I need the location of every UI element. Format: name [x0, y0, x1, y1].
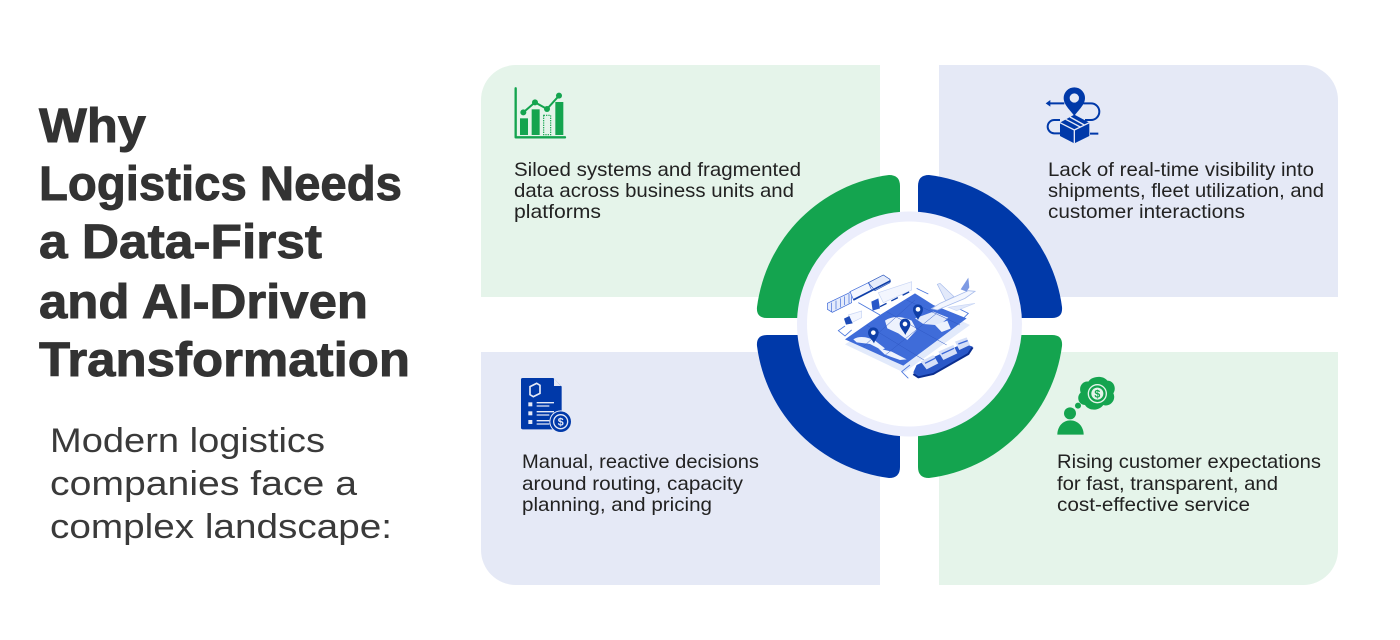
- icon: location pin and package: [1046, 87, 1099, 143]
- text: manual decisions: planning, and pricing: [522, 494, 712, 516]
- panel: manual decisions: [481, 352, 880, 585]
- center circle: [802, 216, 1017, 432]
- title: Transformation: [39, 334, 410, 387]
- text: siloed systems: platforms: [514, 201, 601, 223]
- connector lines: [838, 288, 968, 378]
- ring segment: bottom left blue: [757, 335, 900, 478]
- icon: document with dollar coin: [521, 378, 572, 433]
- text: lack of visibility: Lack of real-time visibility into: [1048, 159, 1314, 181]
- ring segment: top right blue: [918, 175, 1062, 318]
- text: siloed systems: [514, 159, 801, 223]
- ring segment: bottom right green: [918, 335, 1062, 478]
- container ship: [913, 337, 973, 377]
- subtitle: complex landscape:: [50, 508, 392, 546]
- panel: siloed systems: [481, 65, 880, 297]
- text: rising expectations: cost-effective service: [1057, 494, 1250, 516]
- text: rising expectations: for fast, transparent, and: [1057, 473, 1278, 495]
- text: manual decisions: around routing, capacity: [522, 473, 743, 495]
- text: siloed systems: data across business units and: [514, 180, 794, 202]
- icon: customer thinking about cost: [1057, 377, 1115, 435]
- panel: rising expectations: [939, 352, 1338, 585]
- title: and AI-Driven: [39, 276, 368, 329]
- text: rising expectations: Rising customer expectations: [1057, 451, 1321, 473]
- map sheet: [845, 293, 970, 373]
- text: manual decisions: Manual, reactive decisions: [522, 451, 759, 473]
- illustration: world map with transport: [827, 275, 975, 378]
- text: siloed systems: Siloed systems and fragmented: [514, 159, 801, 181]
- icon: bar chart with trend line: [516, 88, 565, 137]
- text: lack of visibility: shipments, fleet utilization, and: [1048, 180, 1324, 202]
- location pins: [868, 304, 923, 343]
- title: Logistics Needs: [39, 158, 402, 211]
- title: Why: [39, 100, 146, 153]
- subtitle: companies face a: [50, 465, 358, 503]
- trains and trucks: [827, 275, 912, 325]
- title: [39, 100, 410, 387]
- subtitle: [50, 422, 392, 546]
- text: lack of visibility: [1048, 159, 1324, 223]
- text: rising expectations: [1057, 451, 1321, 516]
- subtitle: Modern logistics: [50, 422, 325, 460]
- panel: lack of visibility: [939, 65, 1338, 297]
- icon: customer thinking about cost: $: [1094, 389, 1100, 401]
- ring segment: top left green: [757, 175, 900, 318]
- text: lack of visibility: customer interactions: [1048, 201, 1245, 223]
- airplane: [932, 278, 975, 311]
- icon: document with dollar coin: $: [558, 417, 564, 429]
- title: a Data-First: [39, 216, 322, 269]
- text: manual decisions: [522, 451, 759, 516]
